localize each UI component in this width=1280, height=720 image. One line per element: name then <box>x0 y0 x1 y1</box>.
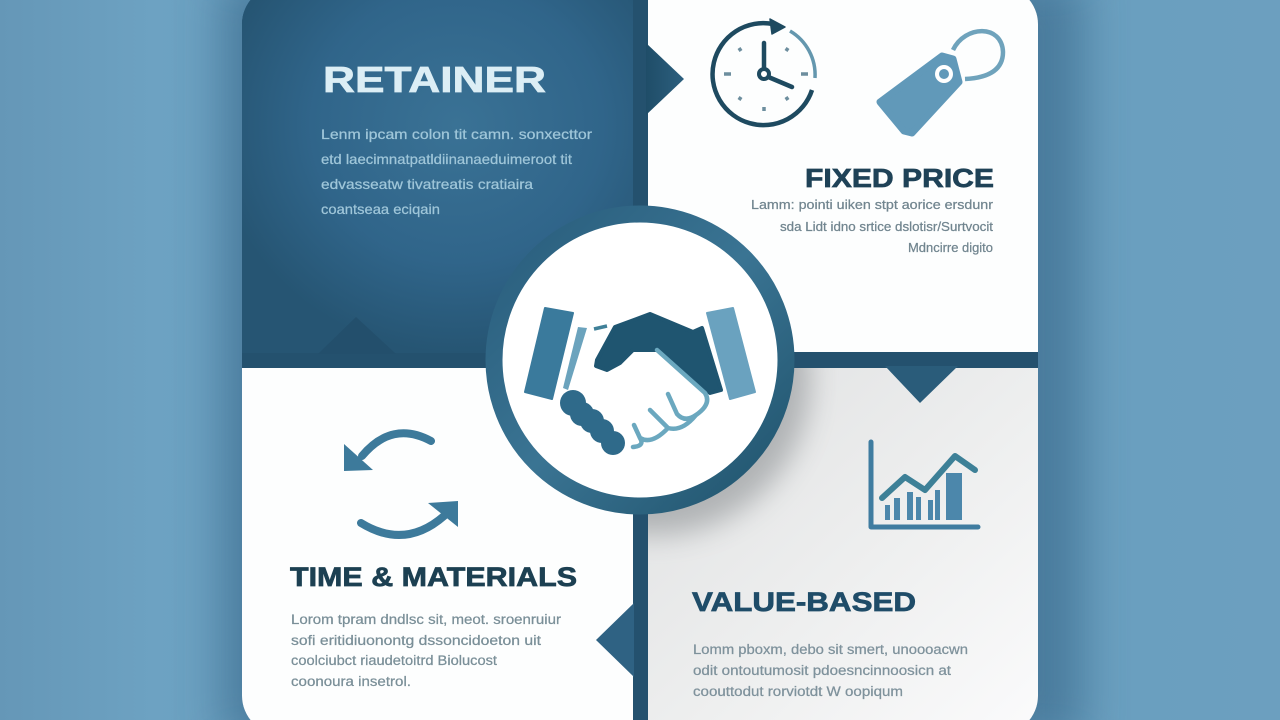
time and materials body text <box>291 612 562 689</box>
center circle <box>494 214 786 506</box>
card grid backing <box>242 0 1039 720</box>
fixed price body text: Mdncirre digito <box>908 240 993 255</box>
retainer body text: Lenm ipcam colon tit camn. sonxecttor <box>321 126 592 142</box>
time and materials body text: Lorom tpram dndlsc sit, meot. sroenruiur <box>291 612 562 627</box>
time and materials body text: sofi eritidiuonontg dssoncidoeton uit <box>291 633 541 648</box>
value-based heading: VALUE-BASED <box>692 587 916 617</box>
value-based body text: Lomm pboxm, debo sit smert, unoooacwn <box>693 642 968 657</box>
panel: value-based <box>648 368 1038 720</box>
retainer heading: RETAINER <box>323 59 546 100</box>
time and materials heading: TIME & MATERIALS <box>290 562 577 592</box>
fixed price body text: Lamm: pointi uiken stpt aorice ersdunr <box>751 197 994 212</box>
value-based body text: coouttodut rorviotdt W oopiqum <box>693 684 903 699</box>
panel: time and materials <box>242 368 633 720</box>
retainer body text <box>321 126 592 217</box>
time and materials body text: coolciubct riaudetoitrd Biolucost <box>291 653 497 668</box>
fixed price body text: sda Lidt idno srtice dslotisr/Surtvocit <box>780 219 993 234</box>
arrow notch: fixed price to value-based <box>885 366 958 403</box>
icon: handshake <box>525 308 755 455</box>
value-based body text: odit ontoutumosit pdoesncinnoosicn at <box>693 663 951 678</box>
circle shadow on value panel <box>648 368 824 548</box>
retainer body text: coantseaa eciqain <box>321 201 440 217</box>
fixed price heading: FIXED PRICE <box>805 163 994 193</box>
fixed price body text <box>751 197 994 255</box>
arrow notch: retainer bottom <box>350 318 382 342</box>
arrow notch: retainer to fixed price <box>648 45 684 113</box>
time and materials body text: coonoura insetrol. <box>291 674 411 689</box>
value-based body text <box>693 642 968 699</box>
retainer body text: etd laecimnatpatldiinanaeduimeroot tit <box>321 151 572 167</box>
icon: price tag <box>880 31 1003 133</box>
panel: retainer <box>242 0 633 353</box>
panel: fixed price <box>648 0 1039 352</box>
icon: cycle arrows <box>344 433 458 535</box>
icon: growth chart <box>871 442 978 527</box>
retainer body text: edvasseatw tivatreatis cratiaira <box>321 176 533 192</box>
arrow notch: time and materials <box>596 603 634 677</box>
icon: clock <box>713 19 815 125</box>
